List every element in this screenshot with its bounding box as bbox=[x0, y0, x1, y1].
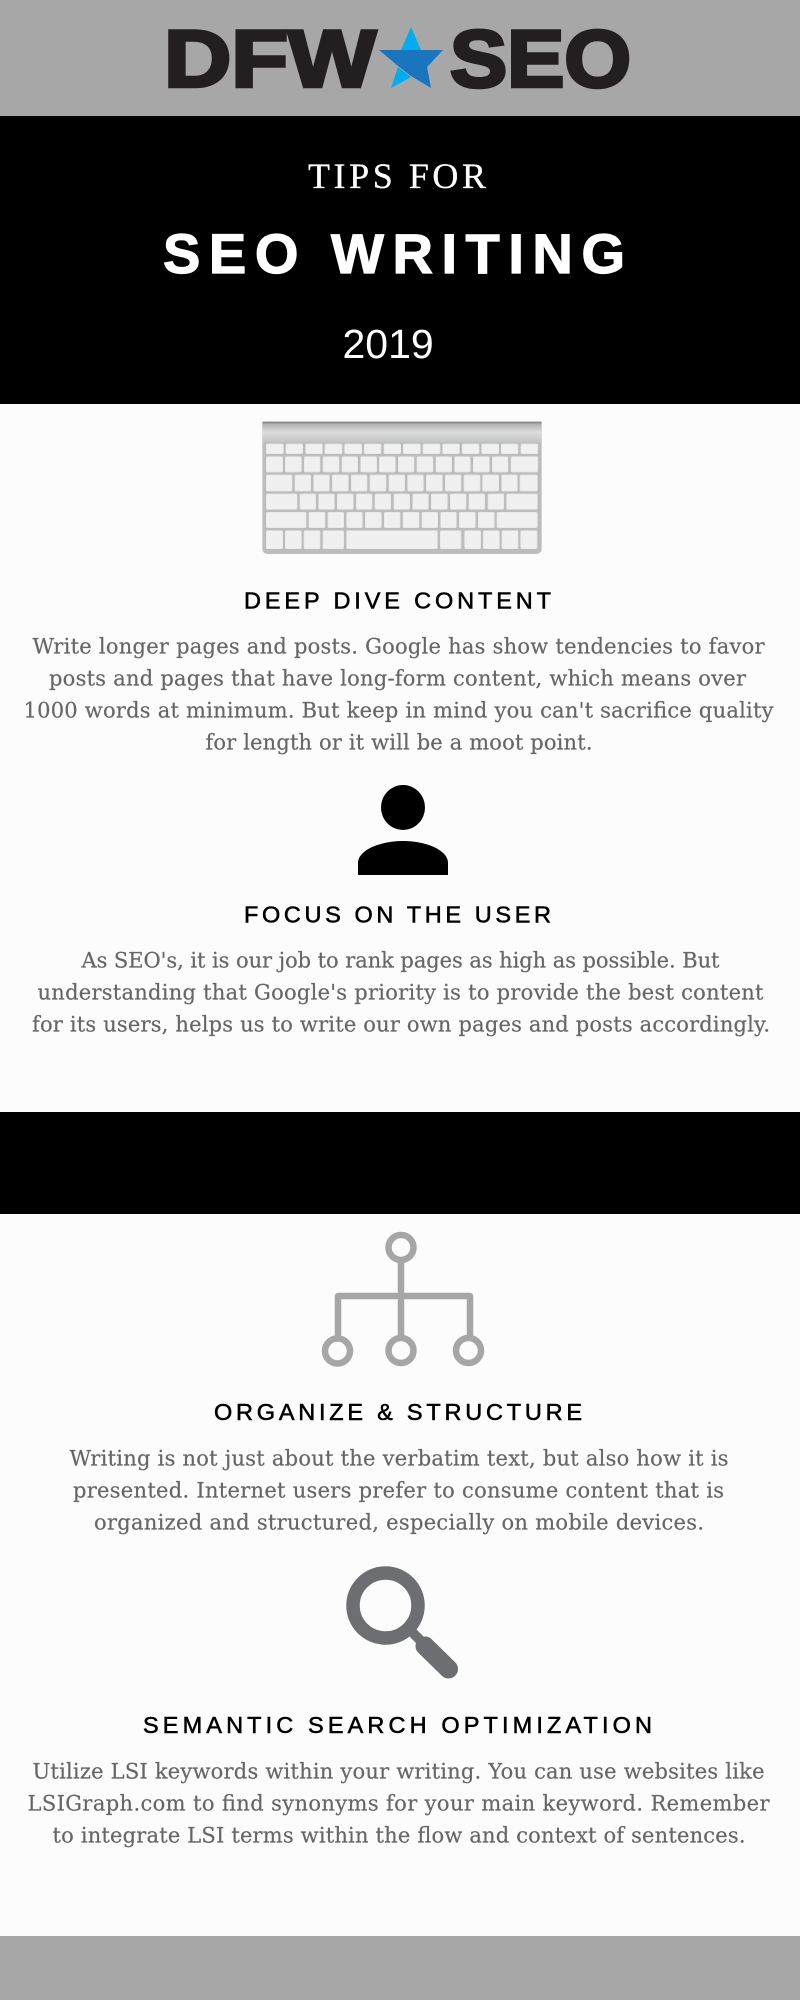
title: year: 2019 bbox=[342, 321, 434, 367]
text: semantic search optimization: to integrate LSI terms within the flow and context of sentences. bbox=[52, 1824, 746, 1848]
black divider band bbox=[0, 1112, 800, 1214]
title: tips for: TIPS FOR bbox=[308, 156, 486, 196]
title: SEO writing: SEO WRITING bbox=[163, 222, 625, 285]
icon: keyboard bbox=[262, 422, 542, 554]
footer band bbox=[0, 1936, 800, 2000]
text: semantic search optimization bbox=[28, 1760, 770, 1848]
text: semantic search optimization: LSIGraph.com to find synonyms for your main keyword. Remember bbox=[28, 1792, 770, 1816]
heading: focus on the user: FOCUS ON THE USER bbox=[244, 902, 551, 928]
text: semantic search optimization: Utilize LSI keywords within your writing. You can use websites like bbox=[32, 1760, 764, 1784]
heading: organize and structure: ORGANIZE & STRUCTURE bbox=[214, 1399, 582, 1425]
logo wordmark: DFW: DFW bbox=[164, 14, 377, 104]
text: deep dive content: posts and pages that have long-form content, which means over bbox=[49, 666, 747, 690]
text: organize and structure bbox=[70, 1446, 728, 1534]
text: organize and structure: Writing is not just about the verbatim text, but also how it is bbox=[70, 1446, 728, 1470]
text: deep dive content: for length or it will be a moot point. bbox=[206, 730, 592, 754]
text: organize and structure: presented. Internet users prefer to consume content that is bbox=[73, 1478, 724, 1502]
text: focus on the user: As SEO's, it is our job to rank pages as high as possible. But bbox=[80, 948, 720, 972]
icon: magnifying glass bbox=[353, 1573, 448, 1669]
text: deep dive content bbox=[24, 634, 774, 754]
logo wordmark: SEO: SEO bbox=[450, 14, 631, 104]
text: focus on the user: for its users, helps us to write our own pages and posts accordingly. bbox=[32, 1012, 770, 1036]
title panel bbox=[0, 116, 800, 404]
heading: semantic search optimization: SEMANTIC SEARCH OPTIMIZATION bbox=[143, 1712, 652, 1738]
text: deep dive content: Write longer pages and posts. Google has show tendencies to favor bbox=[32, 634, 765, 658]
icon: hierarchy bbox=[325, 1235, 481, 1364]
icon: user bbox=[358, 785, 448, 875]
header band with logo bbox=[0, 0, 800, 116]
logo star bbox=[379, 27, 443, 88]
text: focus on the user: understanding that Google's priority is to provide the best content bbox=[38, 980, 764, 1004]
text: organize and structure: organized and structured, especially on mobile devices. bbox=[94, 1510, 704, 1534]
text: deep dive content: 1000 words at minimum. But keep in mind you can't sacrifice quality bbox=[24, 698, 774, 722]
heading: deep dive content: DEEP DIVE CONTENT bbox=[244, 588, 551, 614]
text: focus on the user bbox=[32, 948, 770, 1036]
